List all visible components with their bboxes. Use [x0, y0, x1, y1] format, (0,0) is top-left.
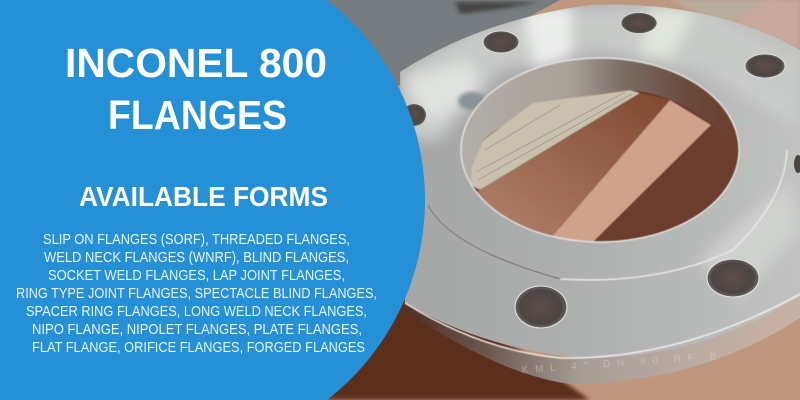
- face reflections: [400, 5, 800, 300]
- pink wood plank: [545, 100, 711, 245]
- list of flange forms: [16, 232, 377, 356]
- list of flange forms: SLIP ON FLANGES (SORF), THREADED FLANGES,: [43, 232, 350, 248]
- pink wood lower area: [470, 93, 670, 245]
- list of flange forms: RING TYPE JOINT FLANGES, SPECTACLE BLIND FLANGES,: [16, 286, 377, 302]
- list of flange forms: NIPO FLANGE, NIPOLET FLANGES, PLATE FLANGES,: [32, 322, 362, 338]
- wood slats: [470, 90, 640, 190]
- list of flange forms: SOCKET WELD FLANGES, LAP JOINT FLANGES,: [48, 268, 345, 284]
- raised face edge: [428, 150, 787, 280]
- bore inner wall: [461, 58, 712, 183]
- flange lower face edge highlight: [405, 294, 800, 358]
- flange stamped marking: KML 4" DN 80 RF B: [521, 351, 717, 376]
- list of flange forms: SPACER RING FLANGES, LONG WELD NECK FLANGES,: [26, 304, 367, 320]
- blue circular panel: [0, 0, 425, 400]
- flange rim: [404, 292, 800, 384]
- flange outer face: [400, 5, 800, 358]
- flange bore: [455, 55, 745, 245]
- heading: available forms: AVAILABLE FORMS: [79, 181, 328, 212]
- bolt holes: [402, 12, 800, 328]
- photo: stainless steel flange: [327, 0, 800, 400]
- title: FLANGES: [108, 92, 287, 138]
- title: [65, 40, 327, 138]
- title: INCONEL 800: [65, 40, 327, 86]
- list of flange forms: WELD NECK FLANGES (WNRF), BLIND FLANGES,: [44, 250, 349, 266]
- list of flange forms: FLAT FLANGE, ORIFICE FLANGES, FORGED FLANGES: [32, 340, 365, 356]
- dull patch near bore: [458, 92, 486, 110]
